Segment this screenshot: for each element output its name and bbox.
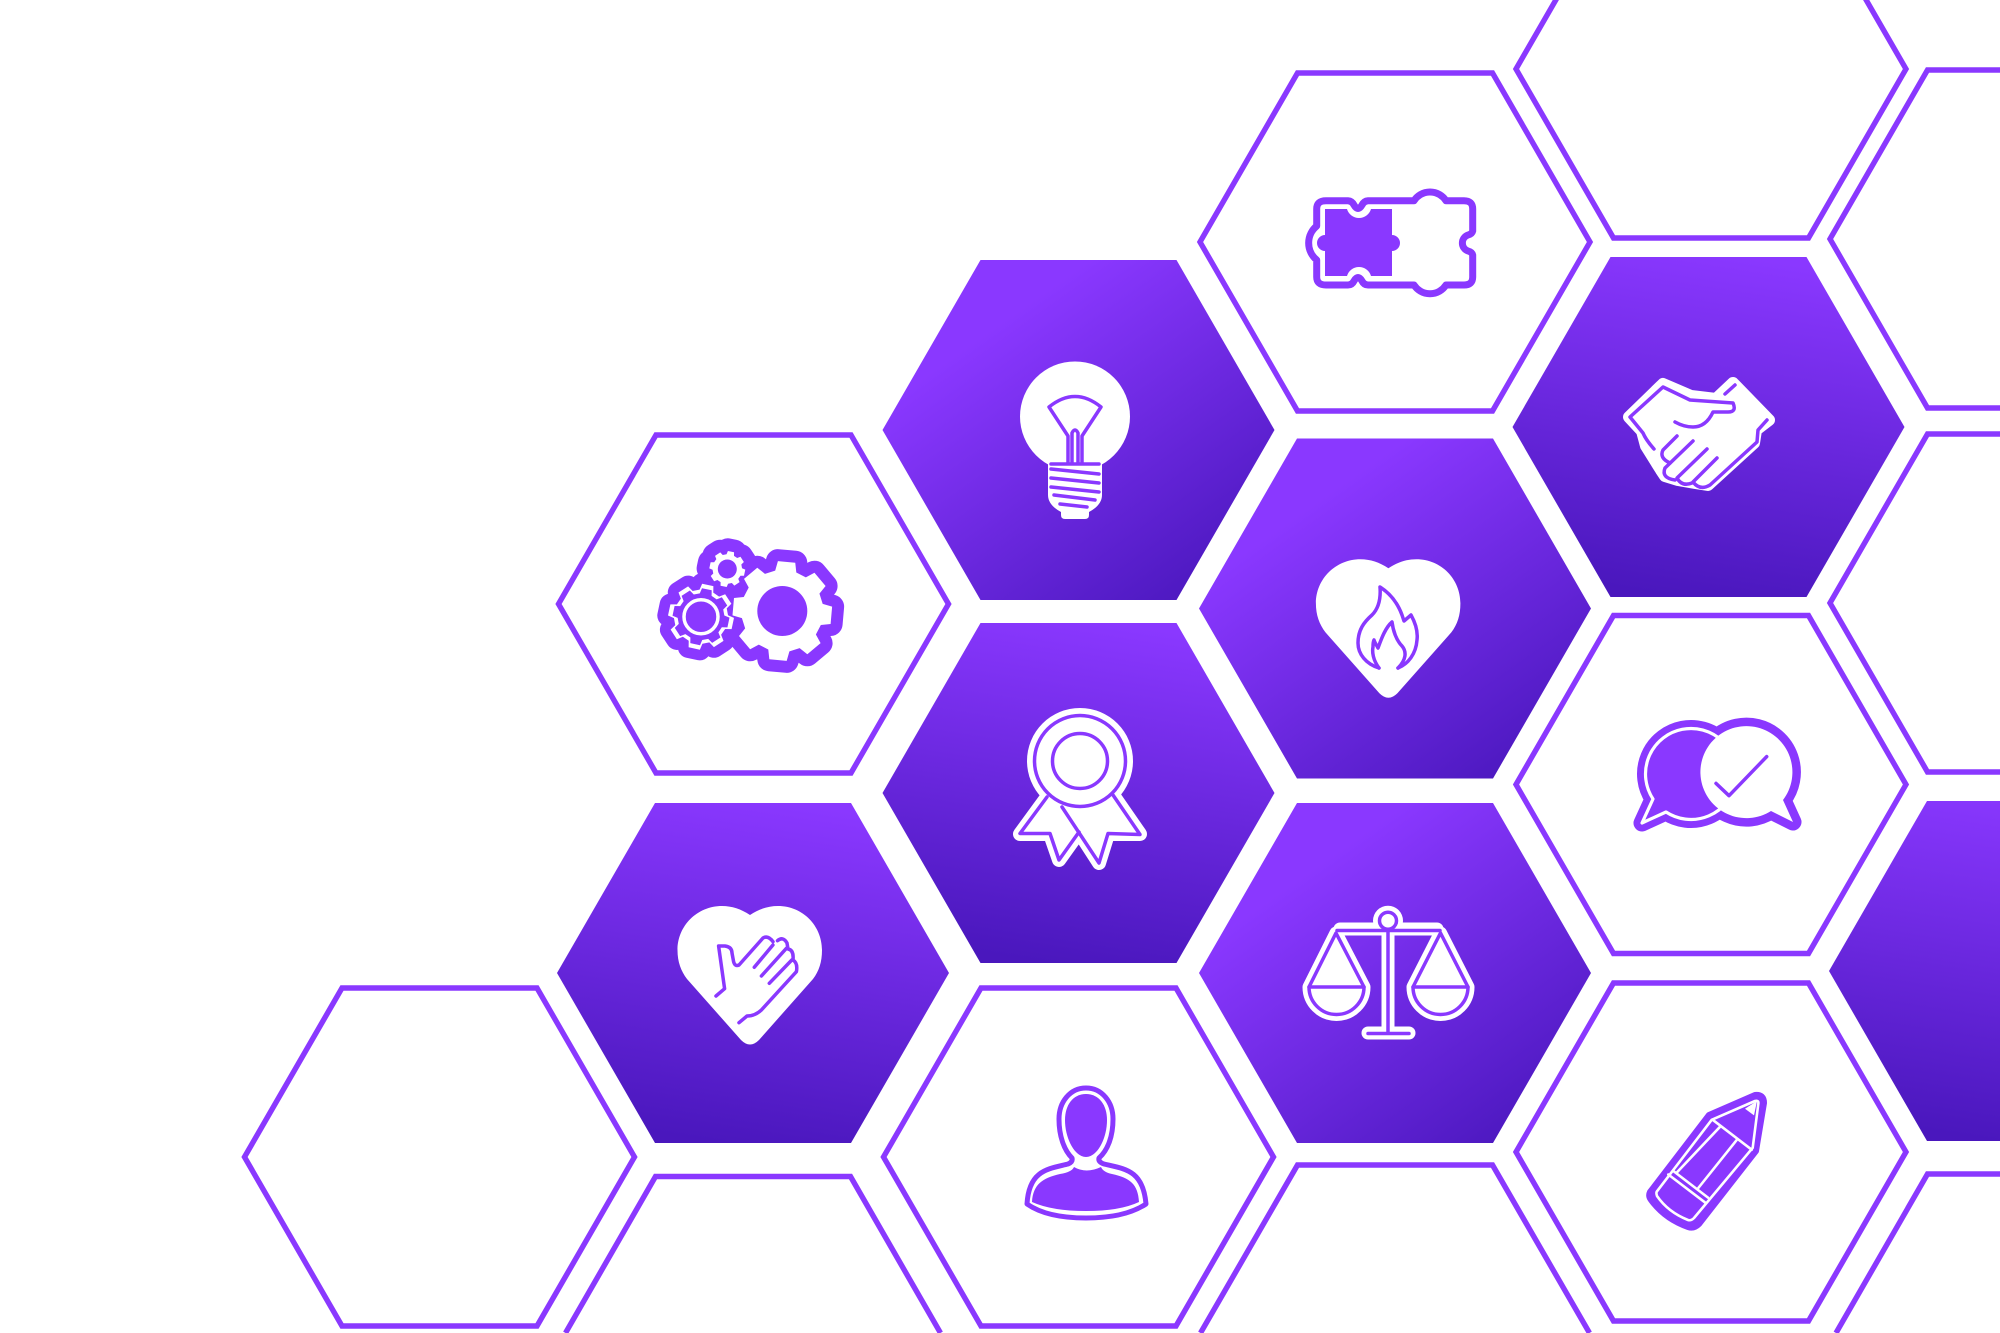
icon: pencil bbox=[1649, 1095, 1764, 1228]
panel: scales hexagon bbox=[1199, 803, 1591, 1143]
panel: handshake hexagon bbox=[1512, 257, 1904, 597]
hexagon: empty outline right middle bbox=[1830, 434, 2000, 772]
panel: award ribbon hexagon bbox=[882, 623, 1274, 963]
hexagon: filled right edge bbox=[1829, 801, 2000, 1141]
panel: gears hexagon bbox=[558, 435, 948, 773]
panel: light bulb hexagon bbox=[882, 260, 1274, 600]
hexagon: empty outline top right bbox=[1516, 0, 1906, 238]
panel: pencil hexagon bbox=[1516, 983, 1906, 1321]
icon: person bbox=[1027, 1088, 1146, 1218]
icon: gears bbox=[662, 548, 836, 664]
icon: chat bubbles with check bbox=[1642, 726, 1793, 823]
hexagon: empty outline bottom bbox=[566, 1176, 940, 1333]
hexagon: empty outline bottom centre bbox=[1200, 1165, 1590, 1333]
panel: heart with flame hexagon bbox=[1199, 438, 1591, 778]
icon: balance scales bbox=[1309, 906, 1468, 1034]
icon: handshake bbox=[1629, 383, 1769, 487]
panel: heart with hand hexagon bbox=[557, 803, 949, 1143]
hexagon: empty outline right lower bbox=[1836, 1174, 2000, 1333]
icon: puzzle pieces bbox=[1309, 192, 1473, 294]
icon: heart with hand bbox=[678, 906, 822, 1044]
icon: award ribbon bbox=[1020, 708, 1140, 863]
hexagon: empty outline bottom left bbox=[244, 988, 634, 1326]
panel: puzzle hexagon bbox=[1200, 73, 1590, 411]
panel: chat hexagon bbox=[1516, 616, 1906, 954]
hexagon: empty outline right upper bbox=[1830, 70, 2000, 408]
panel: person hexagon bbox=[884, 988, 1274, 1326]
icon: light bulb bbox=[1020, 362, 1130, 519]
icon: heart with flame bbox=[1316, 559, 1460, 698]
